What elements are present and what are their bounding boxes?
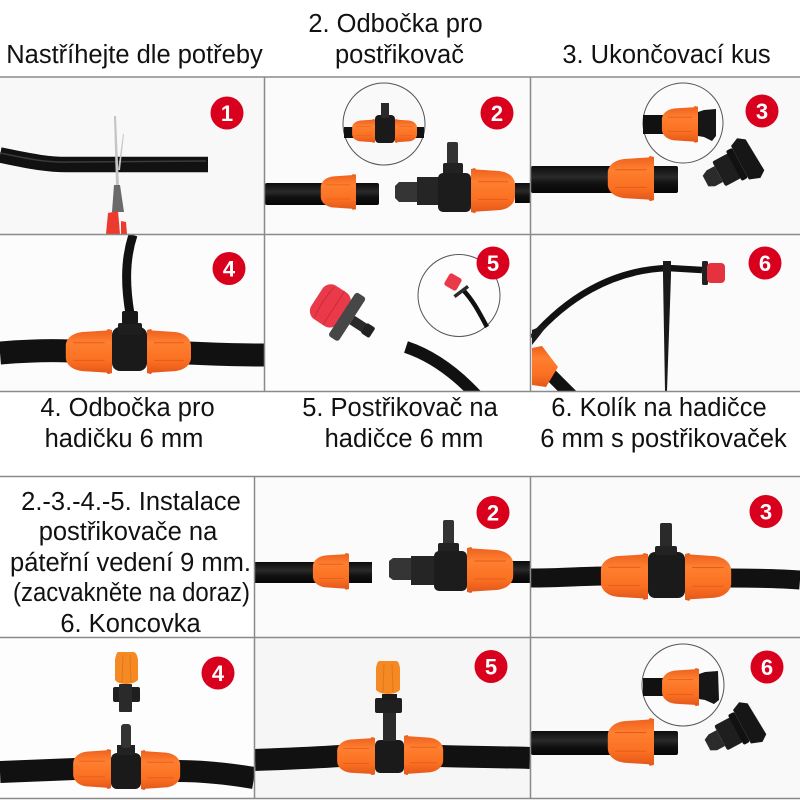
heading: sprinkler on hose <box>302 394 499 453</box>
panel: bottom step 4 <box>0 638 254 798</box>
badge 5: 5 <box>487 251 499 276</box>
badge 3: 3 <box>756 99 768 124</box>
icon: scissors <box>106 116 127 234</box>
tube <box>0 153 208 165</box>
badge 5 <box>474 650 508 683</box>
main tube <box>0 769 254 778</box>
hose <box>406 347 478 397</box>
heading: stake on hose: 6. Kolík na hadičce <box>551 394 767 422</box>
badge 3 <box>746 94 778 128</box>
text block: installation on 9 mm line <box>10 488 251 638</box>
panel: bottom step 5 <box>255 638 530 798</box>
badge 1: 1 <box>221 101 233 126</box>
heading: end piece: 3. Ukončovací kus <box>562 41 771 69</box>
main tube <box>531 576 800 580</box>
panel: step 5 sprinkler on 6 mm hose <box>265 235 530 397</box>
badge 5: 5 <box>485 654 497 680</box>
badge 4: 4 <box>223 256 236 282</box>
text block: installation on 9 mm line: 2.-3.-4.-5. Instalace <box>21 488 241 516</box>
text block: installation on 9 mm line: 6. Koncovka <box>60 610 201 638</box>
heading: stake on hose: 6 mm s postřikovaček <box>540 425 787 453</box>
tee with caps <box>66 311 191 374</box>
heading: sprinkler on hose: hadičce 6 mm <box>325 425 483 453</box>
heading: branch for 6 mm hose <box>40 394 215 453</box>
sprinkler <box>303 275 386 355</box>
badge 6: 6 <box>761 655 773 680</box>
orange cap and tube <box>532 323 572 396</box>
panel: step 3 end piece <box>531 78 800 234</box>
text block: installation on 9 mm line: postřikovače na <box>39 518 218 546</box>
heading: branch for 6 mm hose: 4. Odbočka pro <box>40 394 215 422</box>
tube with cap <box>531 718 678 766</box>
inset circle <box>643 83 723 163</box>
badge 4 <box>212 252 246 285</box>
inset circle <box>418 254 500 336</box>
heading: stake on hose <box>540 394 787 453</box>
badge 2 <box>480 96 514 130</box>
badge 4 <box>202 656 234 690</box>
tee fitting <box>395 142 530 213</box>
red sprinkler <box>702 261 725 285</box>
end plug <box>697 698 769 765</box>
text block: installation on 9 mm line: (zacvakněte na doraz) <box>13 579 250 607</box>
badge 2: 2 <box>491 101 503 126</box>
tee with caps <box>337 711 443 775</box>
tee fitting <box>389 520 530 593</box>
heading: branch for 6 mm hose: hadičku 6 mm <box>45 425 203 453</box>
tee with caps <box>601 523 731 601</box>
heading: sprinkler branch: postřikovač <box>335 41 464 69</box>
badge 5 <box>476 246 510 280</box>
inset circle <box>642 644 724 726</box>
orange nozzle <box>113 652 140 712</box>
text block: installation on 9 mm line: páteřní vedení 9 mm. <box>10 549 251 577</box>
panel: step 2 sprinkler branch <box>265 78 530 234</box>
stake <box>663 261 671 391</box>
panel: step 4 branch for 6 mm hose <box>0 235 264 391</box>
arc hose <box>532 268 702 338</box>
badge 6 <box>748 246 782 280</box>
main tube <box>0 351 264 355</box>
panel: step 1 cutting the tube <box>0 78 264 234</box>
thin hose <box>127 235 133 314</box>
tube with cap <box>531 156 678 201</box>
panel: bottom step 3 <box>531 477 800 637</box>
badge 4: 4 <box>212 661 225 686</box>
panel: bottom step 6 <box>531 638 800 798</box>
badge 6: 6 <box>759 251 771 276</box>
heading: sprinkler on hose: 5. Postřikovač na <box>302 394 499 422</box>
tube with cap <box>265 174 379 210</box>
badge 1 <box>210 96 244 130</box>
orange nozzle <box>375 661 402 713</box>
tee with caps <box>73 724 180 790</box>
heading: sprinkler branch <box>308 10 483 69</box>
tube with cap <box>255 553 372 590</box>
badge 6 <box>750 650 784 684</box>
panel: step 6 stake on 6 mm hose <box>531 235 800 396</box>
badge 2: 2 <box>487 500 499 526</box>
inset circle <box>343 83 425 165</box>
heading: cut as needed: Nastříhejte dle potřeby <box>6 41 263 69</box>
badge 2 <box>476 496 510 529</box>
panel: bottom step 2 <box>255 477 530 637</box>
badge 3: 3 <box>760 500 772 524</box>
main tube <box>255 756 530 760</box>
end plug <box>695 134 767 201</box>
heading: sprinkler branch: 2. Odbočka pro <box>308 10 483 38</box>
badge 3 <box>750 495 782 528</box>
